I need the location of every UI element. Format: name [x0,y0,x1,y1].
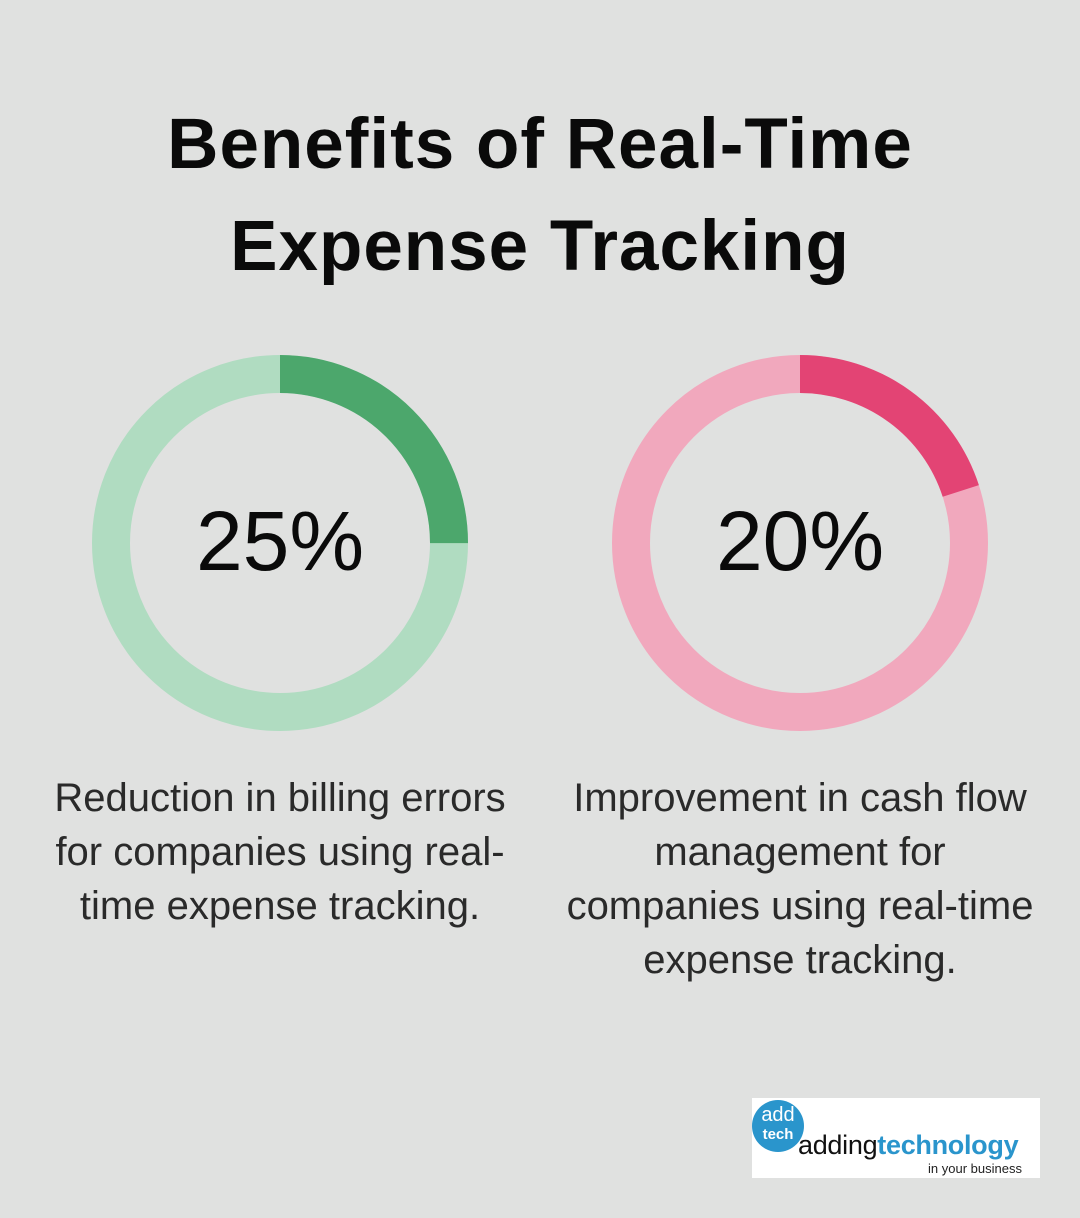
donut chart: 25% [92,355,468,731]
logo icon circle: tech [763,1126,793,1143]
title: Expense Tracking [230,207,850,286]
logo [752,1098,1040,1178]
logo tagline: in your business [928,1161,1022,1176]
title: Benefits of Real-Time [167,105,913,184]
logo wordmark: addingtechnology [798,1130,1018,1160]
logo icon circle: add [761,1104,795,1126]
donut chart: 20% [612,355,988,731]
caption: cash flow: Improvement in cash flow management for companies using real-time expense tracking. [567,776,1033,982]
logo icon circle [752,1100,804,1152]
stat: 25%: 25% [196,494,364,588]
caption: billing errors: Reduction in billing errors for companies using real-time expense tracking. [54,776,506,928]
title [167,105,913,286]
stat: 20%: 20% [716,494,884,588]
